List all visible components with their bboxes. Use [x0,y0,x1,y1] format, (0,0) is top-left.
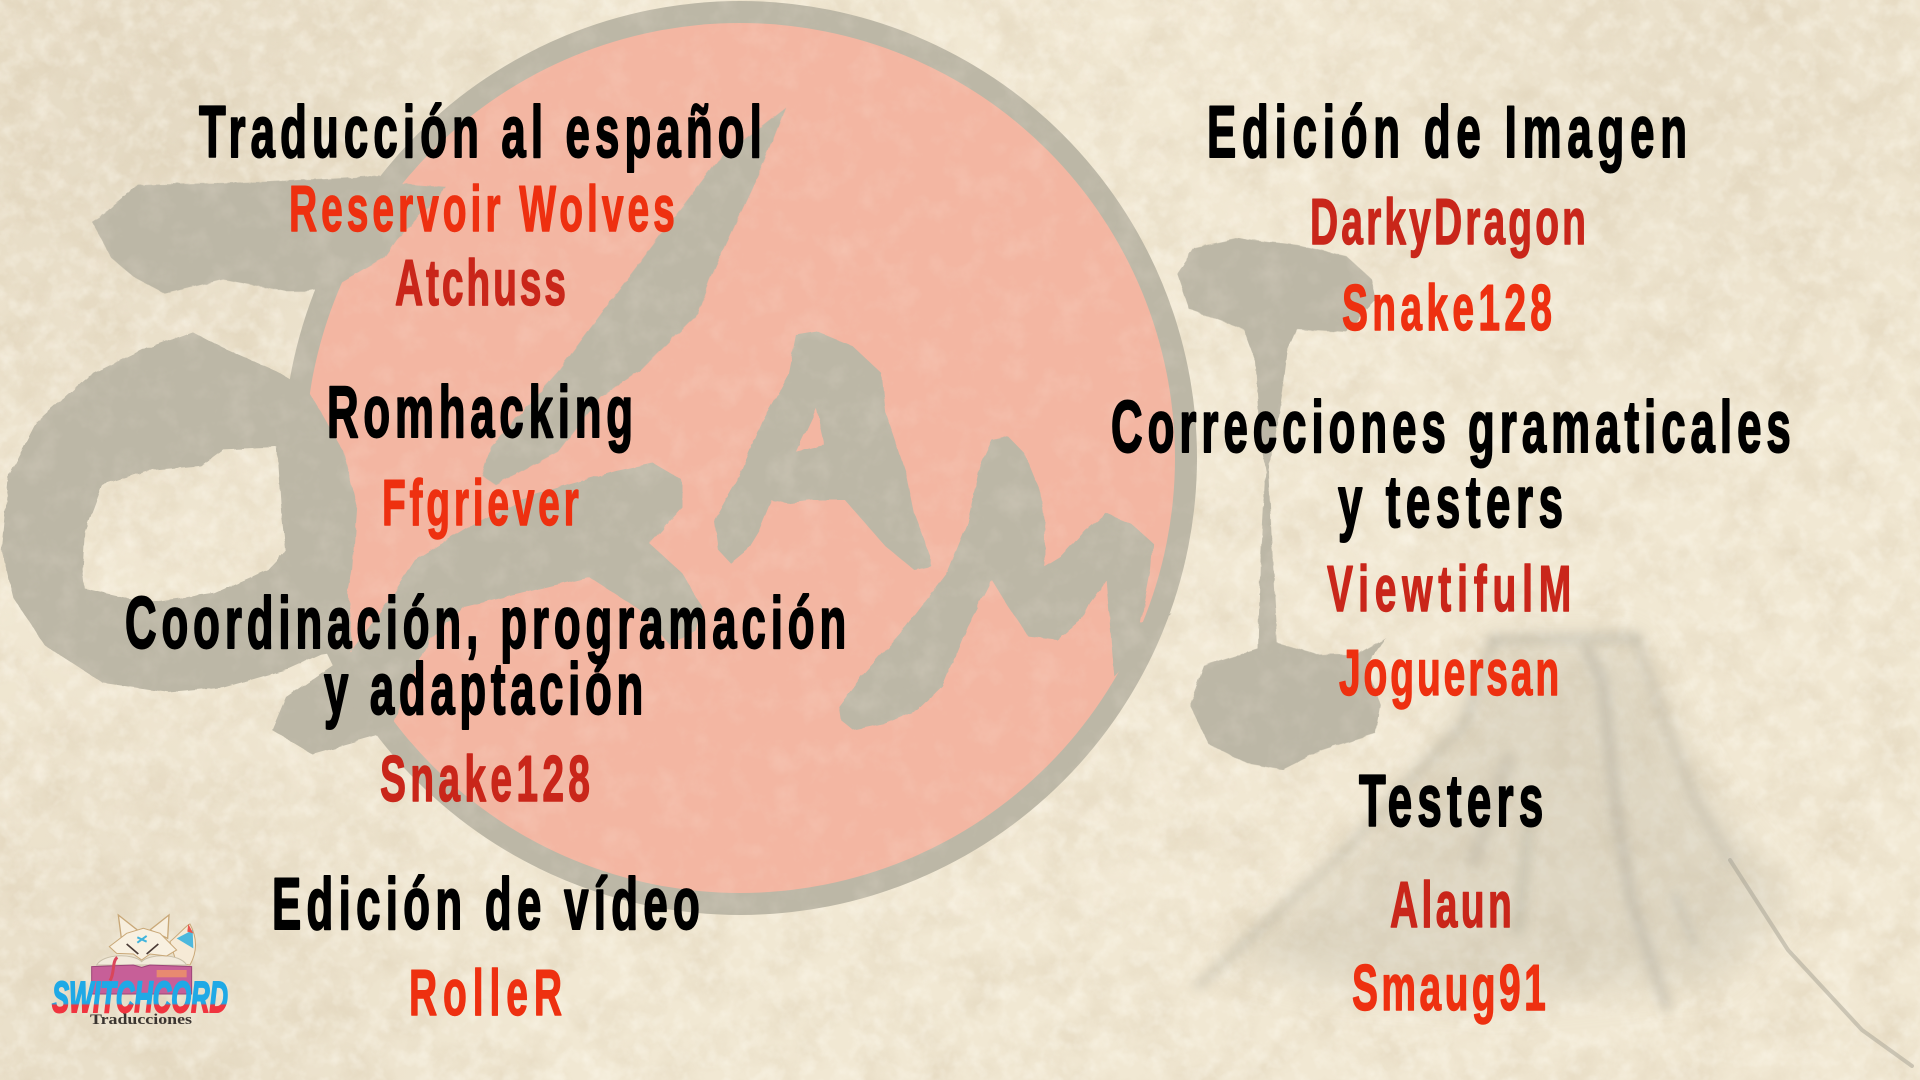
brush letter: O ring [2,331,357,692]
heading: Edición de Imagen: Edición de Imagen [1207,92,1687,173]
credits: right column [1111,92,1791,1025]
name: RolleR: RolleR [409,957,562,1030]
name: Alaun: Alaun [1390,869,1512,942]
brush letter: I [1177,238,1386,770]
heading: Romhacking: Romhacking [327,372,633,453]
heading: Edición de vídeo: Edición de vídeo [272,864,700,945]
brush lettering: OKAMI [2,107,1386,770]
logo: SwitchCord Traducciones [52,915,228,1028]
name: Snake128: Snake128 [380,743,590,816]
heading: Testers: Testers [1359,761,1543,842]
ink and sun mottling [0,0,1420,930]
heading: y adaptación: y adaptación [324,649,643,730]
mountain ink wash [1199,638,1912,1066]
name: Smaug91: Smaug91 [1352,952,1546,1025]
name: Reservoir Wolves: Reservoir Wolves [289,173,675,246]
credits: left column [125,92,846,1030]
heading: Coordinación, programación: Coordinación, programación [125,583,846,664]
brush letter: A [714,332,931,570]
name: Snake128: Snake128 [1342,272,1552,345]
heading: y testers: y testers [1338,462,1563,543]
heading: Traducción al español: Traducción al español [199,92,762,173]
name: Atchuss: Atchuss [395,247,566,320]
heading: Correcciones gramaticales: Correcciones gramaticales [1111,387,1791,468]
logo subtitle: Traducciones [90,1012,192,1028]
red sun with ink ring [283,1,1197,915]
icon: fox on book [92,915,196,994]
brush letter: K diagonal [482,107,786,485]
logo wordmark: SWITCHCORD [52,973,228,1022]
name: Joguersan: Joguersan [1339,637,1559,710]
name: DarkyDragon: DarkyDragon [1310,186,1586,259]
brush letter: M [839,437,1171,730]
brush letter: K lower stroke [272,463,702,754]
name: ViewtifulM: ViewtifulM [1327,553,1571,626]
brush letter: K top bar [92,176,446,294]
name: Ffgriever: Ffgriever [382,467,579,540]
